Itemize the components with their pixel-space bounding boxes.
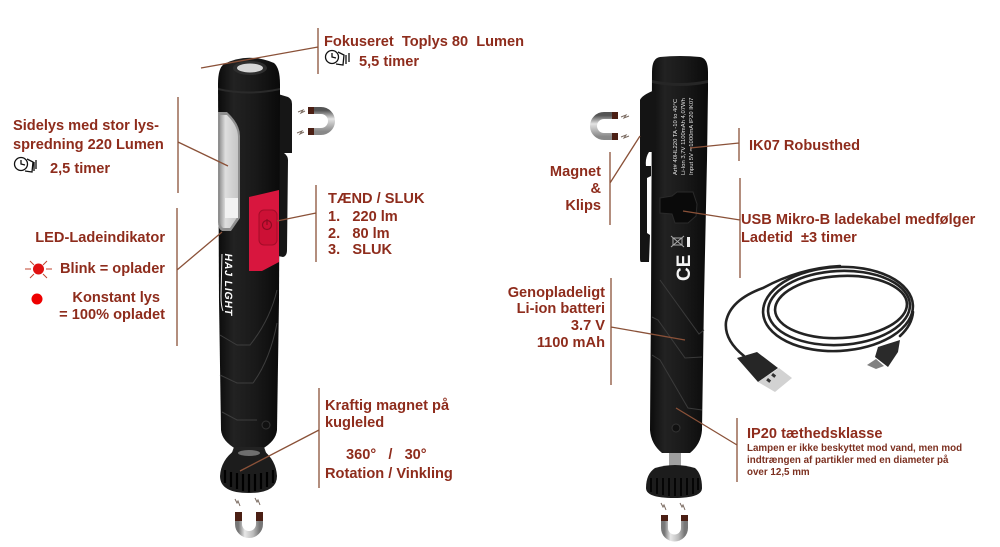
callout: IK07 xyxy=(690,128,860,161)
label: charge time: Ladetid ±3 timer xyxy=(741,230,857,246)
leader: IK07 xyxy=(690,128,739,161)
leader: side light xyxy=(178,97,228,193)
label: capacity: 1100 mAh xyxy=(537,335,605,351)
icon: runtime clock, top light xyxy=(326,50,349,65)
callout: magnet and clip xyxy=(550,136,640,225)
label: ampersand: & xyxy=(590,181,601,197)
blink label: Blink = oplader xyxy=(60,261,165,277)
ball joint, back xyxy=(669,453,681,466)
callout: LED charge indicator xyxy=(25,208,222,346)
heading: ball joint: Kraftig magnet på xyxy=(325,398,450,414)
rating label xyxy=(673,98,695,175)
top lens xyxy=(233,61,267,75)
label: li-ion: Li-ion batteri xyxy=(517,301,605,317)
heading: IP20: IP20 tæthedsklasse xyxy=(747,426,882,442)
leader: USB xyxy=(683,178,740,278)
CE mark: CE xyxy=(674,255,695,281)
torch: back view xyxy=(640,56,708,498)
head collar xyxy=(652,80,708,86)
callout: ball joint magnet xyxy=(240,388,453,488)
knob, back xyxy=(646,465,702,498)
rating label: Input 5V ⎓1000mA IP20 IK07 xyxy=(689,98,695,175)
rotation labels: Rotation / Vinkling xyxy=(325,466,453,482)
callout: battery xyxy=(508,278,685,385)
ball joint xyxy=(230,447,268,458)
icon: steady LED xyxy=(32,294,42,304)
heading line 2: ball joint: kugleled xyxy=(325,415,384,431)
label: rechargeable: Genopladeligt xyxy=(508,285,605,301)
description line 2: indtrængen af partikler med en diameter på xyxy=(747,455,949,466)
cable coil xyxy=(726,263,915,356)
leader: magnet and clip xyxy=(610,136,640,225)
label: magnet: Magnet xyxy=(550,164,601,180)
torch clip, front xyxy=(278,94,292,257)
torch head collar xyxy=(218,88,280,94)
micro-USB plug xyxy=(867,340,900,369)
rating label: Art# 40HL220 TA -10 to 40°C xyxy=(673,98,679,175)
callout: top light xyxy=(201,28,524,74)
callout: USB xyxy=(683,178,976,278)
disposal mark xyxy=(671,236,690,247)
icon: blinking LED xyxy=(25,261,52,278)
body ridges, front xyxy=(220,290,277,420)
small screw, back xyxy=(672,424,680,432)
callout: IP20 xyxy=(676,408,962,482)
ridges, back xyxy=(652,280,704,410)
leader: LED indicator xyxy=(177,208,222,346)
label: IK07: IK07 Robusthed xyxy=(749,138,860,154)
description line 3: over 12,5 mm xyxy=(747,467,810,478)
heading: side light: Sidelys med stor lys- xyxy=(13,118,159,134)
torch body, front xyxy=(218,58,280,449)
callout: side light xyxy=(13,97,228,193)
small screw xyxy=(262,421,270,429)
leader: IP20 xyxy=(676,408,737,482)
magnet: back bottom xyxy=(661,503,688,538)
leader: ball joint xyxy=(240,388,319,488)
magnet: front side xyxy=(297,107,332,135)
clip, back xyxy=(640,90,655,262)
label: clip: Klips xyxy=(565,198,601,214)
runtime: top light: 5,5 timer xyxy=(359,54,419,70)
USB cable xyxy=(726,263,915,392)
torch body, back xyxy=(650,56,708,453)
runtime: side light: 2,5 timer xyxy=(50,161,110,177)
heading: top light: Fokuseret Toplys 80 Lumen xyxy=(324,34,524,50)
red power button xyxy=(249,190,279,271)
mode 2: 2. 80 lm xyxy=(328,226,390,242)
torch: front view xyxy=(218,58,292,493)
label: USB cable: USB Mikro-B ladekabel medfølger xyxy=(741,212,976,228)
leader: power switch xyxy=(277,185,316,262)
USB-A plug xyxy=(737,352,792,392)
knob xyxy=(220,450,277,493)
mode 1: 1. 220 lm xyxy=(328,209,398,225)
mode 3: 3. SLUK xyxy=(328,242,393,258)
callout: power switch xyxy=(277,185,425,262)
magnet: front bottom xyxy=(235,498,263,534)
icon: runtime clock, side light xyxy=(14,158,36,172)
heading: power switch: TÆND / SLUK xyxy=(328,191,425,207)
brand name: HAJ LIGHT xyxy=(222,252,234,317)
description line 1: Lampen er ikke beskyttet mod vand, men mod xyxy=(747,443,962,454)
angles: 360° / 30° xyxy=(346,447,427,463)
heading: LED indicator: LED-Ladeindikator xyxy=(35,230,165,246)
leader: top light xyxy=(201,28,318,74)
magnet: back side xyxy=(594,112,629,140)
steady label: Konstant lys xyxy=(72,290,160,306)
USB port cover xyxy=(660,192,697,223)
steady label line 2: = 100% opladet xyxy=(59,307,165,323)
heading line 2: side light: spredning 220 Lumen xyxy=(13,137,164,153)
rating label: Li-Ion 3,7V 1100mAh 4,07Wh xyxy=(681,98,687,175)
side light window xyxy=(218,112,240,231)
leader: battery xyxy=(611,278,685,385)
label: voltage: 3.7 V xyxy=(571,318,605,334)
